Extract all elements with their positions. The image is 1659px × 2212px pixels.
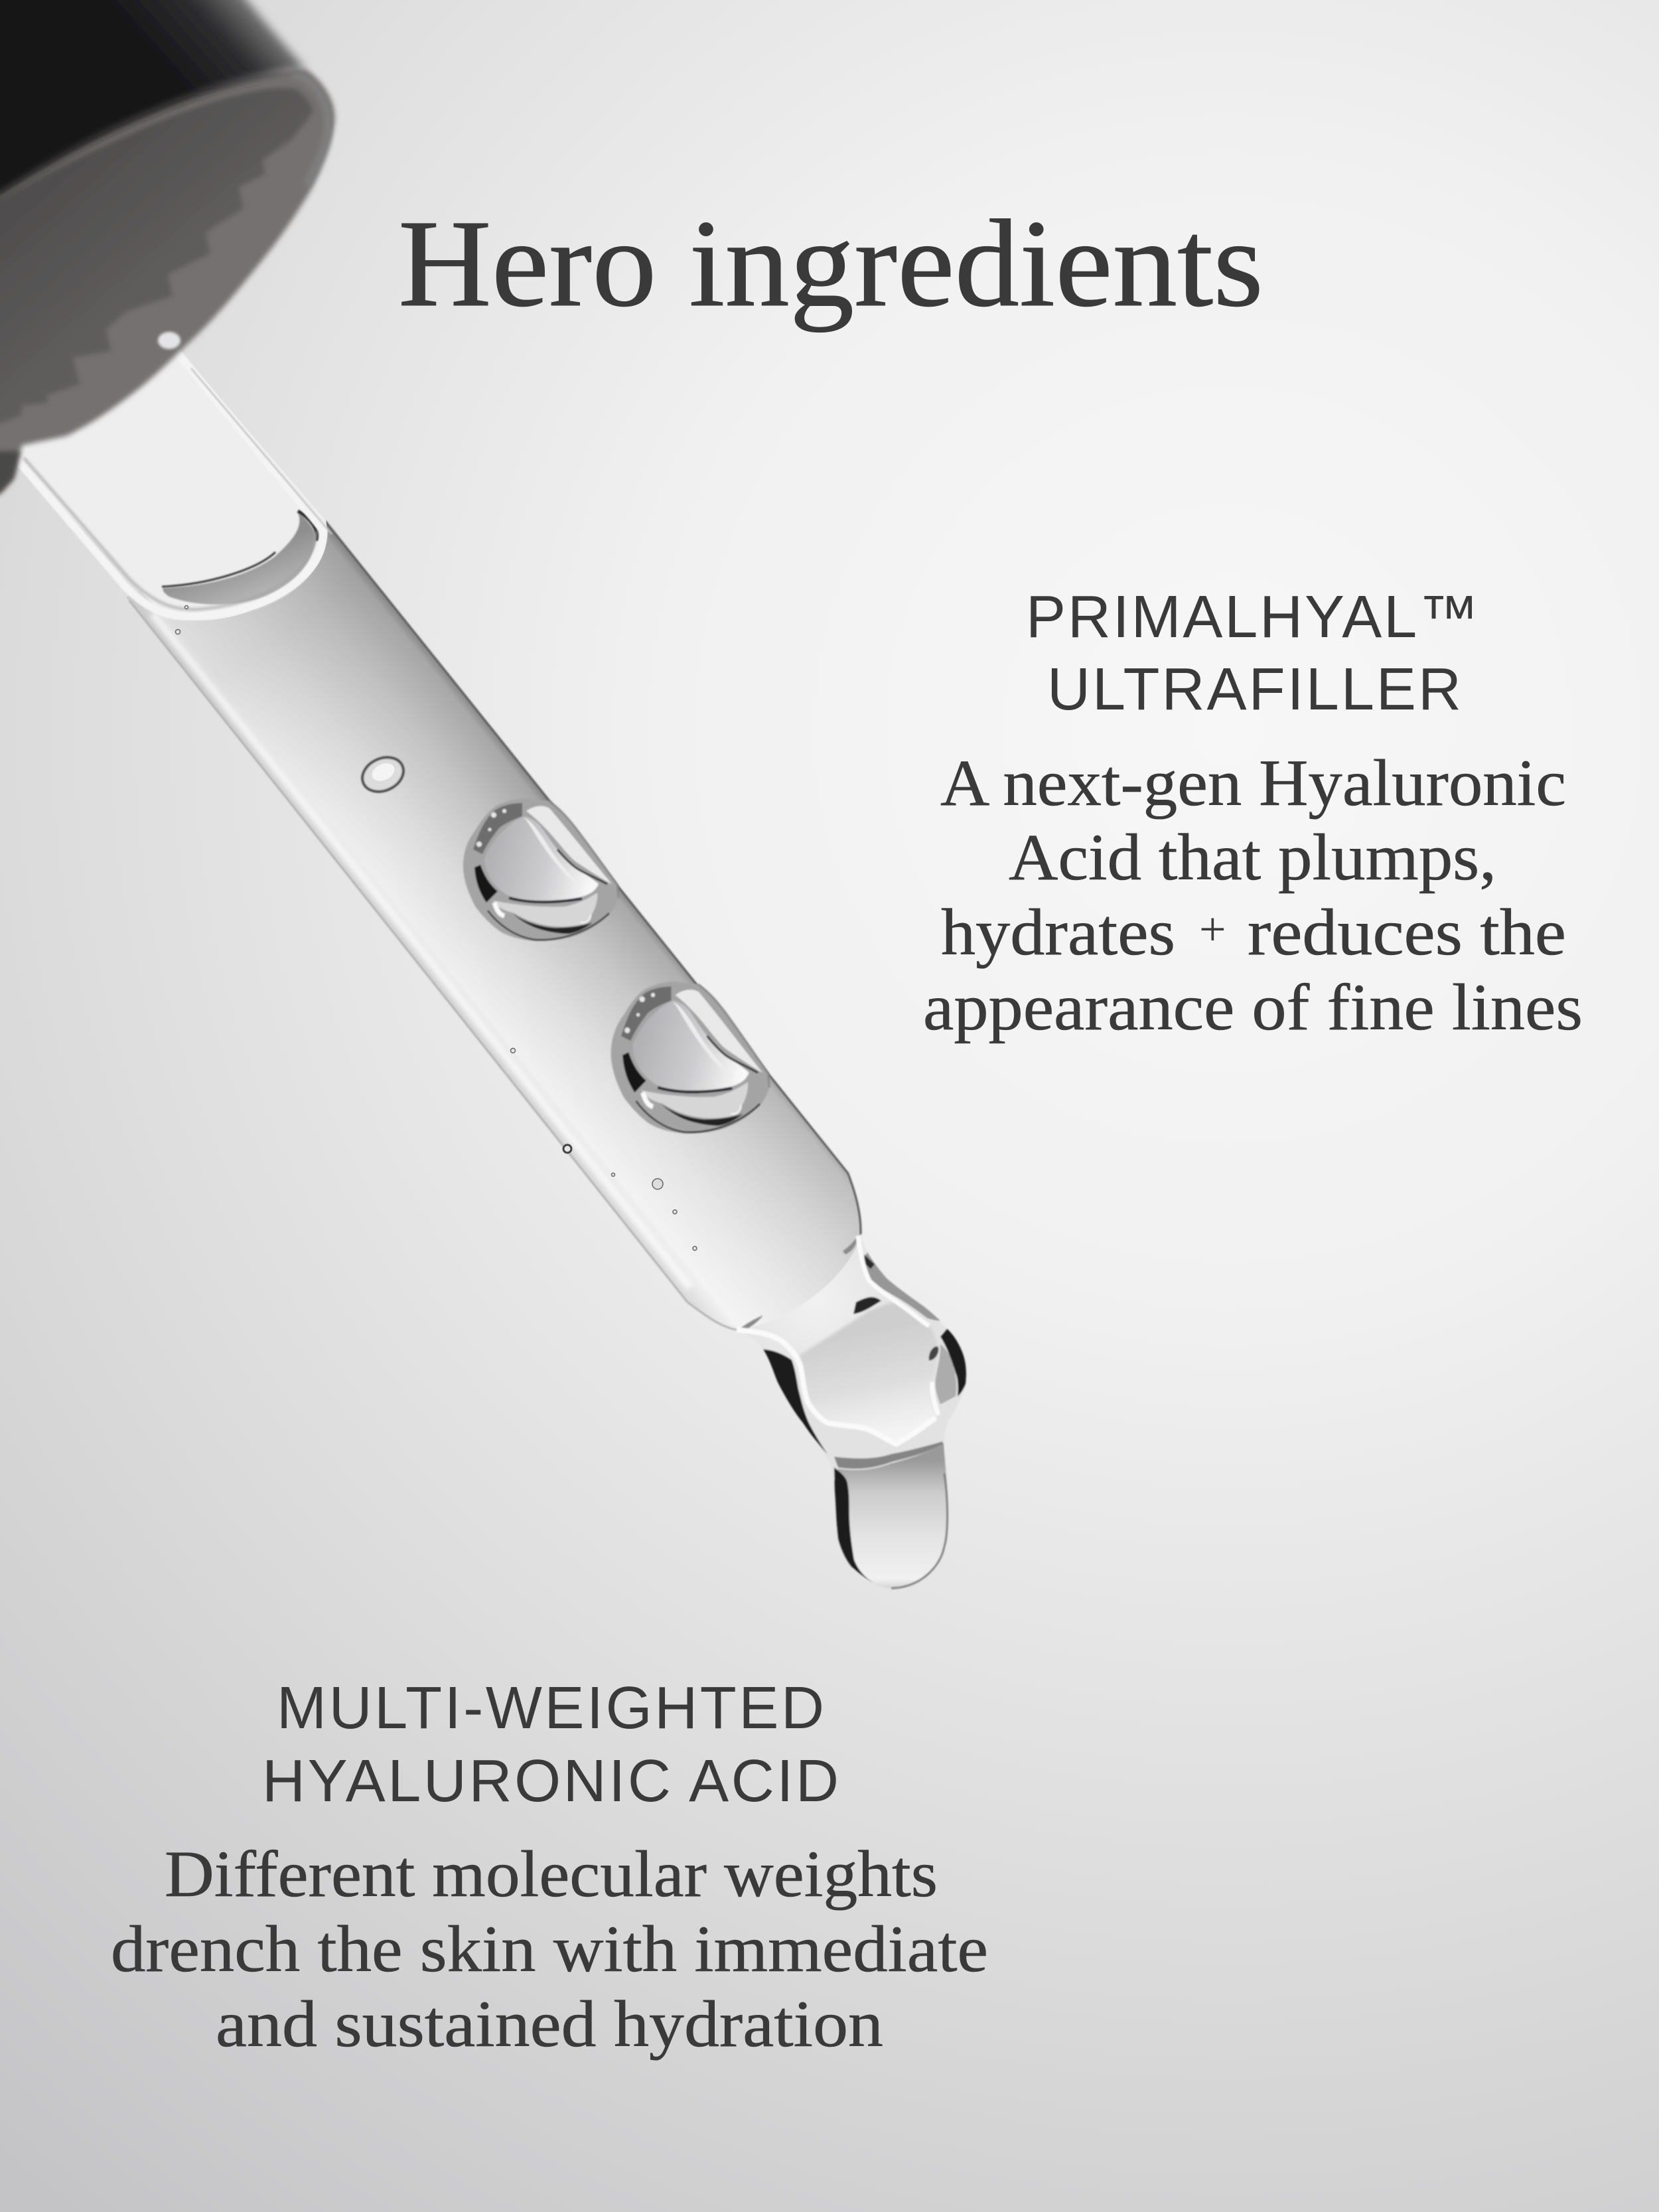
large bubble lower [611, 982, 769, 1134]
cap shadow at tube [0, 451, 20, 498]
heading [1026, 584, 1479, 723]
cap rim highlight [292, 74, 328, 186]
heading: PRIMALHYAL™ [1026, 584, 1479, 650]
heading [262, 1675, 839, 1814]
panel: Multi-weighted Hyaluronic Acid [111, 1675, 988, 2061]
cap serrated inner ring [0, 88, 313, 431]
description: appearance of fine lines [923, 970, 1583, 1044]
description: hydrates [941, 895, 1175, 969]
description: A next-gen Hyaluronic [940, 746, 1566, 820]
heading: MULTI-WEIGHTED [277, 1675, 824, 1741]
cap outer body [0, 0, 307, 212]
drop silhouette [737, 1234, 966, 1588]
description [923, 746, 1583, 1044]
heading: HYALURONIC ACID [262, 1748, 839, 1814]
description: reduces the [1248, 895, 1566, 969]
panel: Primalhyal Ultrafiller [923, 584, 1583, 1044]
description: Acid that plumps, [1009, 820, 1496, 894]
upper tube with meniscus [10, 335, 332, 621]
micro bubbles [175, 605, 697, 1250]
serum drop [737, 1234, 966, 1588]
description: + [1199, 903, 1226, 956]
description [111, 1837, 988, 2061]
dropper pipette [0, 0, 966, 1588]
title: Hero ingredients [398, 194, 1263, 332]
small bubble [357, 751, 409, 798]
large bubble upper [463, 798, 618, 941]
tube collar knob [158, 332, 180, 349]
description: and sustained hydration [216, 1987, 883, 2061]
description: drench the skin with immediate [111, 1912, 988, 1986]
cap inner face [0, 69, 334, 493]
glass tube body [126, 511, 861, 1330]
description: Different molecular weights [165, 1837, 938, 1911]
dark dropper cap [0, 0, 334, 498]
heading: ULTRAFILLER [1047, 656, 1461, 723]
